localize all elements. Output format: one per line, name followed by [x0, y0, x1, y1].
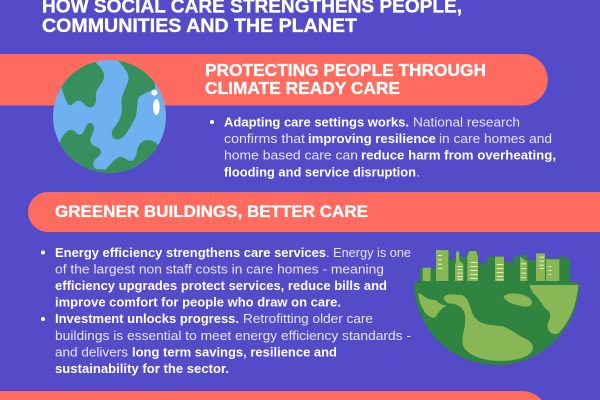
- text block: adapting care settings: flooding and service disruption: [224, 166, 416, 180]
- text block: adapting care settings: confirms that: [224, 132, 306, 146]
- text block: adapting care settings: improving resilience: [308, 132, 436, 146]
- text block: adapting care settings: home based care can: [224, 148, 358, 162]
- text block: energy efficiency: of the largest non staff costs in care homes - meaning: [55, 262, 384, 276]
- text block: energy efficiency: Energy efficiency strengthens care services: [55, 246, 326, 260]
- title: [42, 0, 462, 37]
- text block: energy efficiency: improve comfort for people who draw on care.: [55, 296, 341, 310]
- text block: adapting care settings: reduce harm from overheating,: [361, 148, 556, 162]
- heading: climate ready care: [205, 60, 486, 98]
- text block: adapting care settings: [210, 116, 556, 180]
- panel: next section banner: [0, 391, 548, 400]
- text block: investment unlocks progress: buildings is essential to meet energy efficiency standards -: [55, 329, 411, 343]
- icon: green city on half globe: [414, 250, 579, 365]
- icon: earth globe: [53, 60, 166, 173]
- text block: investment unlocks progress: [41, 312, 411, 376]
- text block: adapting care settings: National research: [413, 116, 520, 130]
- text block: energy efficiency: efficiency upgrades protect services, reduce bills and: [55, 279, 387, 293]
- text block: investment unlocks progress: sustainability for the sector.: [55, 362, 229, 376]
- title: COMMUNITIES AND THE PLANET: [42, 15, 357, 37]
- text block: investment unlocks progress: long term savings, resilience and: [132, 346, 337, 360]
- heading: climate ready care: CLIMATE READY CARE: [205, 78, 400, 98]
- text block: energy efficiency: [41, 246, 411, 310]
- panel: climate ready care banner: [0, 54, 548, 106]
- heading: greener buildings: GREENER BUILDINGS, BETTER CARE: [55, 202, 368, 221]
- heading: climate ready care: PROTECTING PEOPLE THROUGH: [205, 60, 486, 80]
- text block: investment unlocks progress: and delivers: [55, 346, 128, 360]
- text block: adapting care settings: .: [416, 166, 420, 180]
- text block: investment unlocks progress: Retrofitting older care: [243, 312, 373, 326]
- text block: adapting care settings: in care homes and: [439, 132, 552, 146]
- text block: energy efficiency: . Energy is one: [326, 246, 411, 260]
- text block: adapting care settings: Adapting care settings works.: [224, 116, 409, 130]
- text block: investment unlocks progress: Investment unlocks progress.: [55, 312, 239, 326]
- panel: greener buildings banner: [28, 192, 600, 232]
